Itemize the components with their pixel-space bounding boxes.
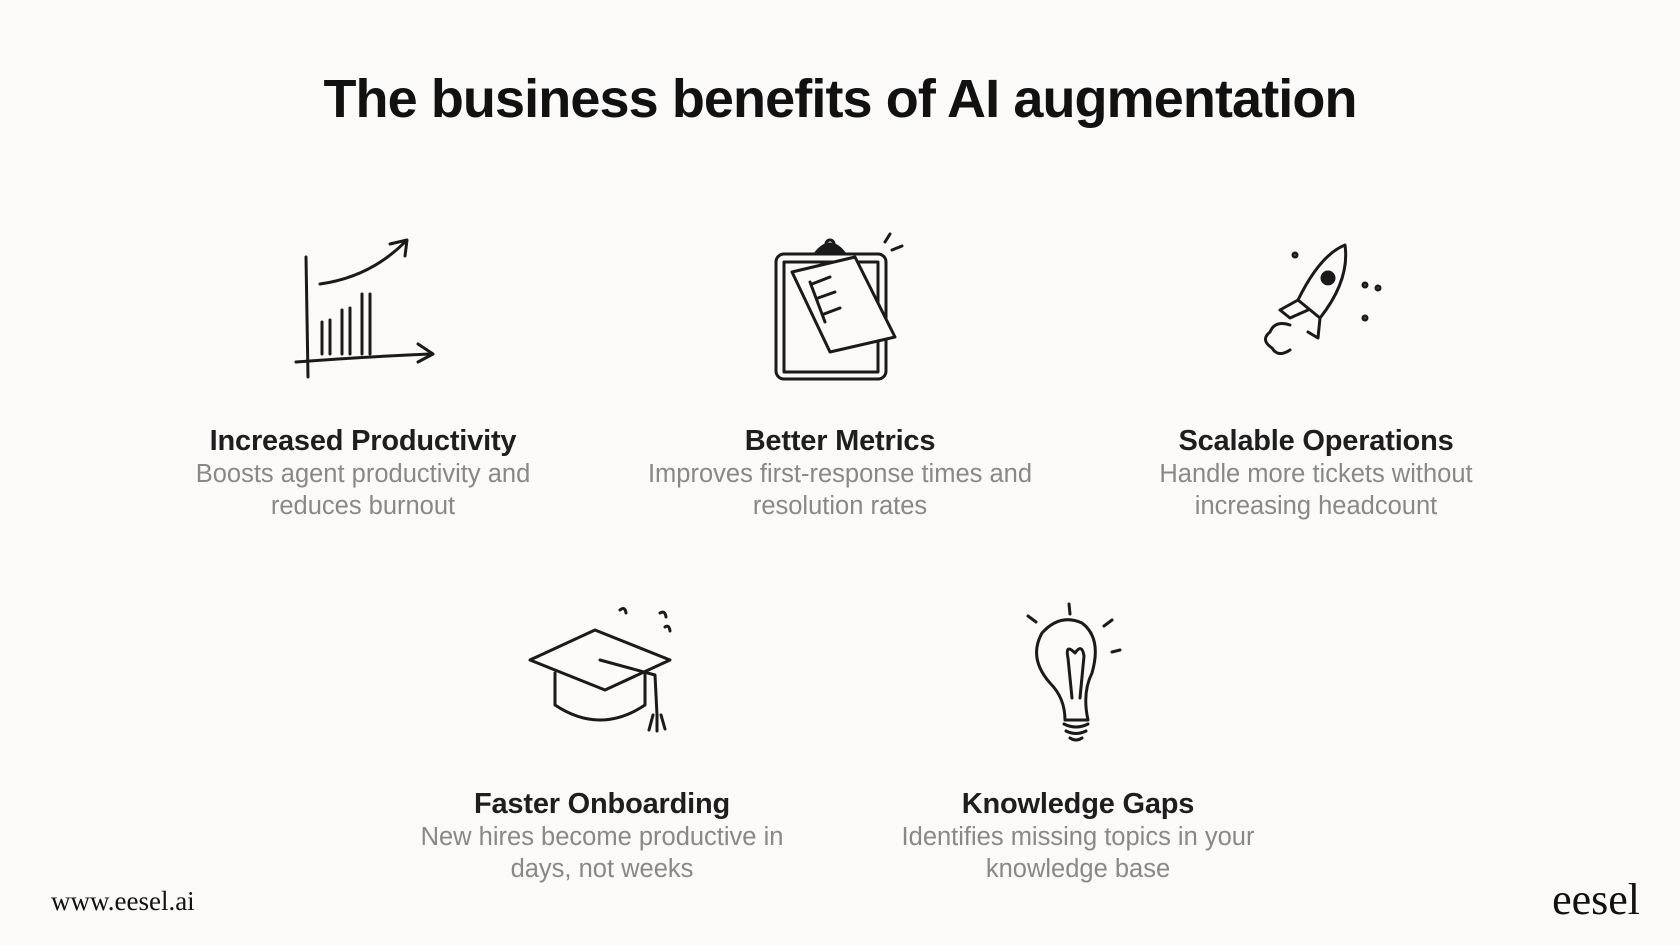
item: scalable operations: Handle more tickets without [1159,460,1473,488]
item: knowledge gaps: knowledge base [986,855,1170,883]
item: better metrics: resolution rates [753,492,927,520]
footer: url: www.eesel.ai [51,886,195,916]
item: faster onboarding: days, not weeks [511,855,693,883]
item: increased productivity: Increased Productivity [210,425,516,457]
item: knowledge gaps: Knowledge Gaps [962,788,1194,820]
icon: light bulb [1026,602,1122,742]
item: better metrics: Improves first-response times and [648,460,1032,488]
icon: rocket [1264,244,1382,355]
item: faster onboarding: New hires become productive in [421,823,783,851]
footer: logo: eesel [1552,875,1640,924]
title: The business benefits of AI augmentation [323,69,1357,129]
item: scalable operations: increasing headcount [1195,492,1437,520]
item: scalable operations [1159,425,1473,520]
item: increased productivity: Boosts agent productivity and [196,460,530,488]
item: faster onboarding: Faster Onboarding [474,788,730,820]
icon: graduation cap [528,607,672,732]
item: knowledge gaps [902,788,1254,883]
icon: clipboard [774,232,904,380]
item: better metrics: Better Metrics [745,425,935,457]
item: better metrics [648,425,1032,520]
item: scalable operations: Scalable Operations [1178,425,1454,457]
item: faster onboarding [421,788,783,883]
icon: bar chart [294,238,435,378]
item: knowledge gaps: Identifies missing topics in your [902,823,1254,851]
item: increased productivity: reduces burnout [271,492,455,520]
item: increased productivity [196,425,530,520]
